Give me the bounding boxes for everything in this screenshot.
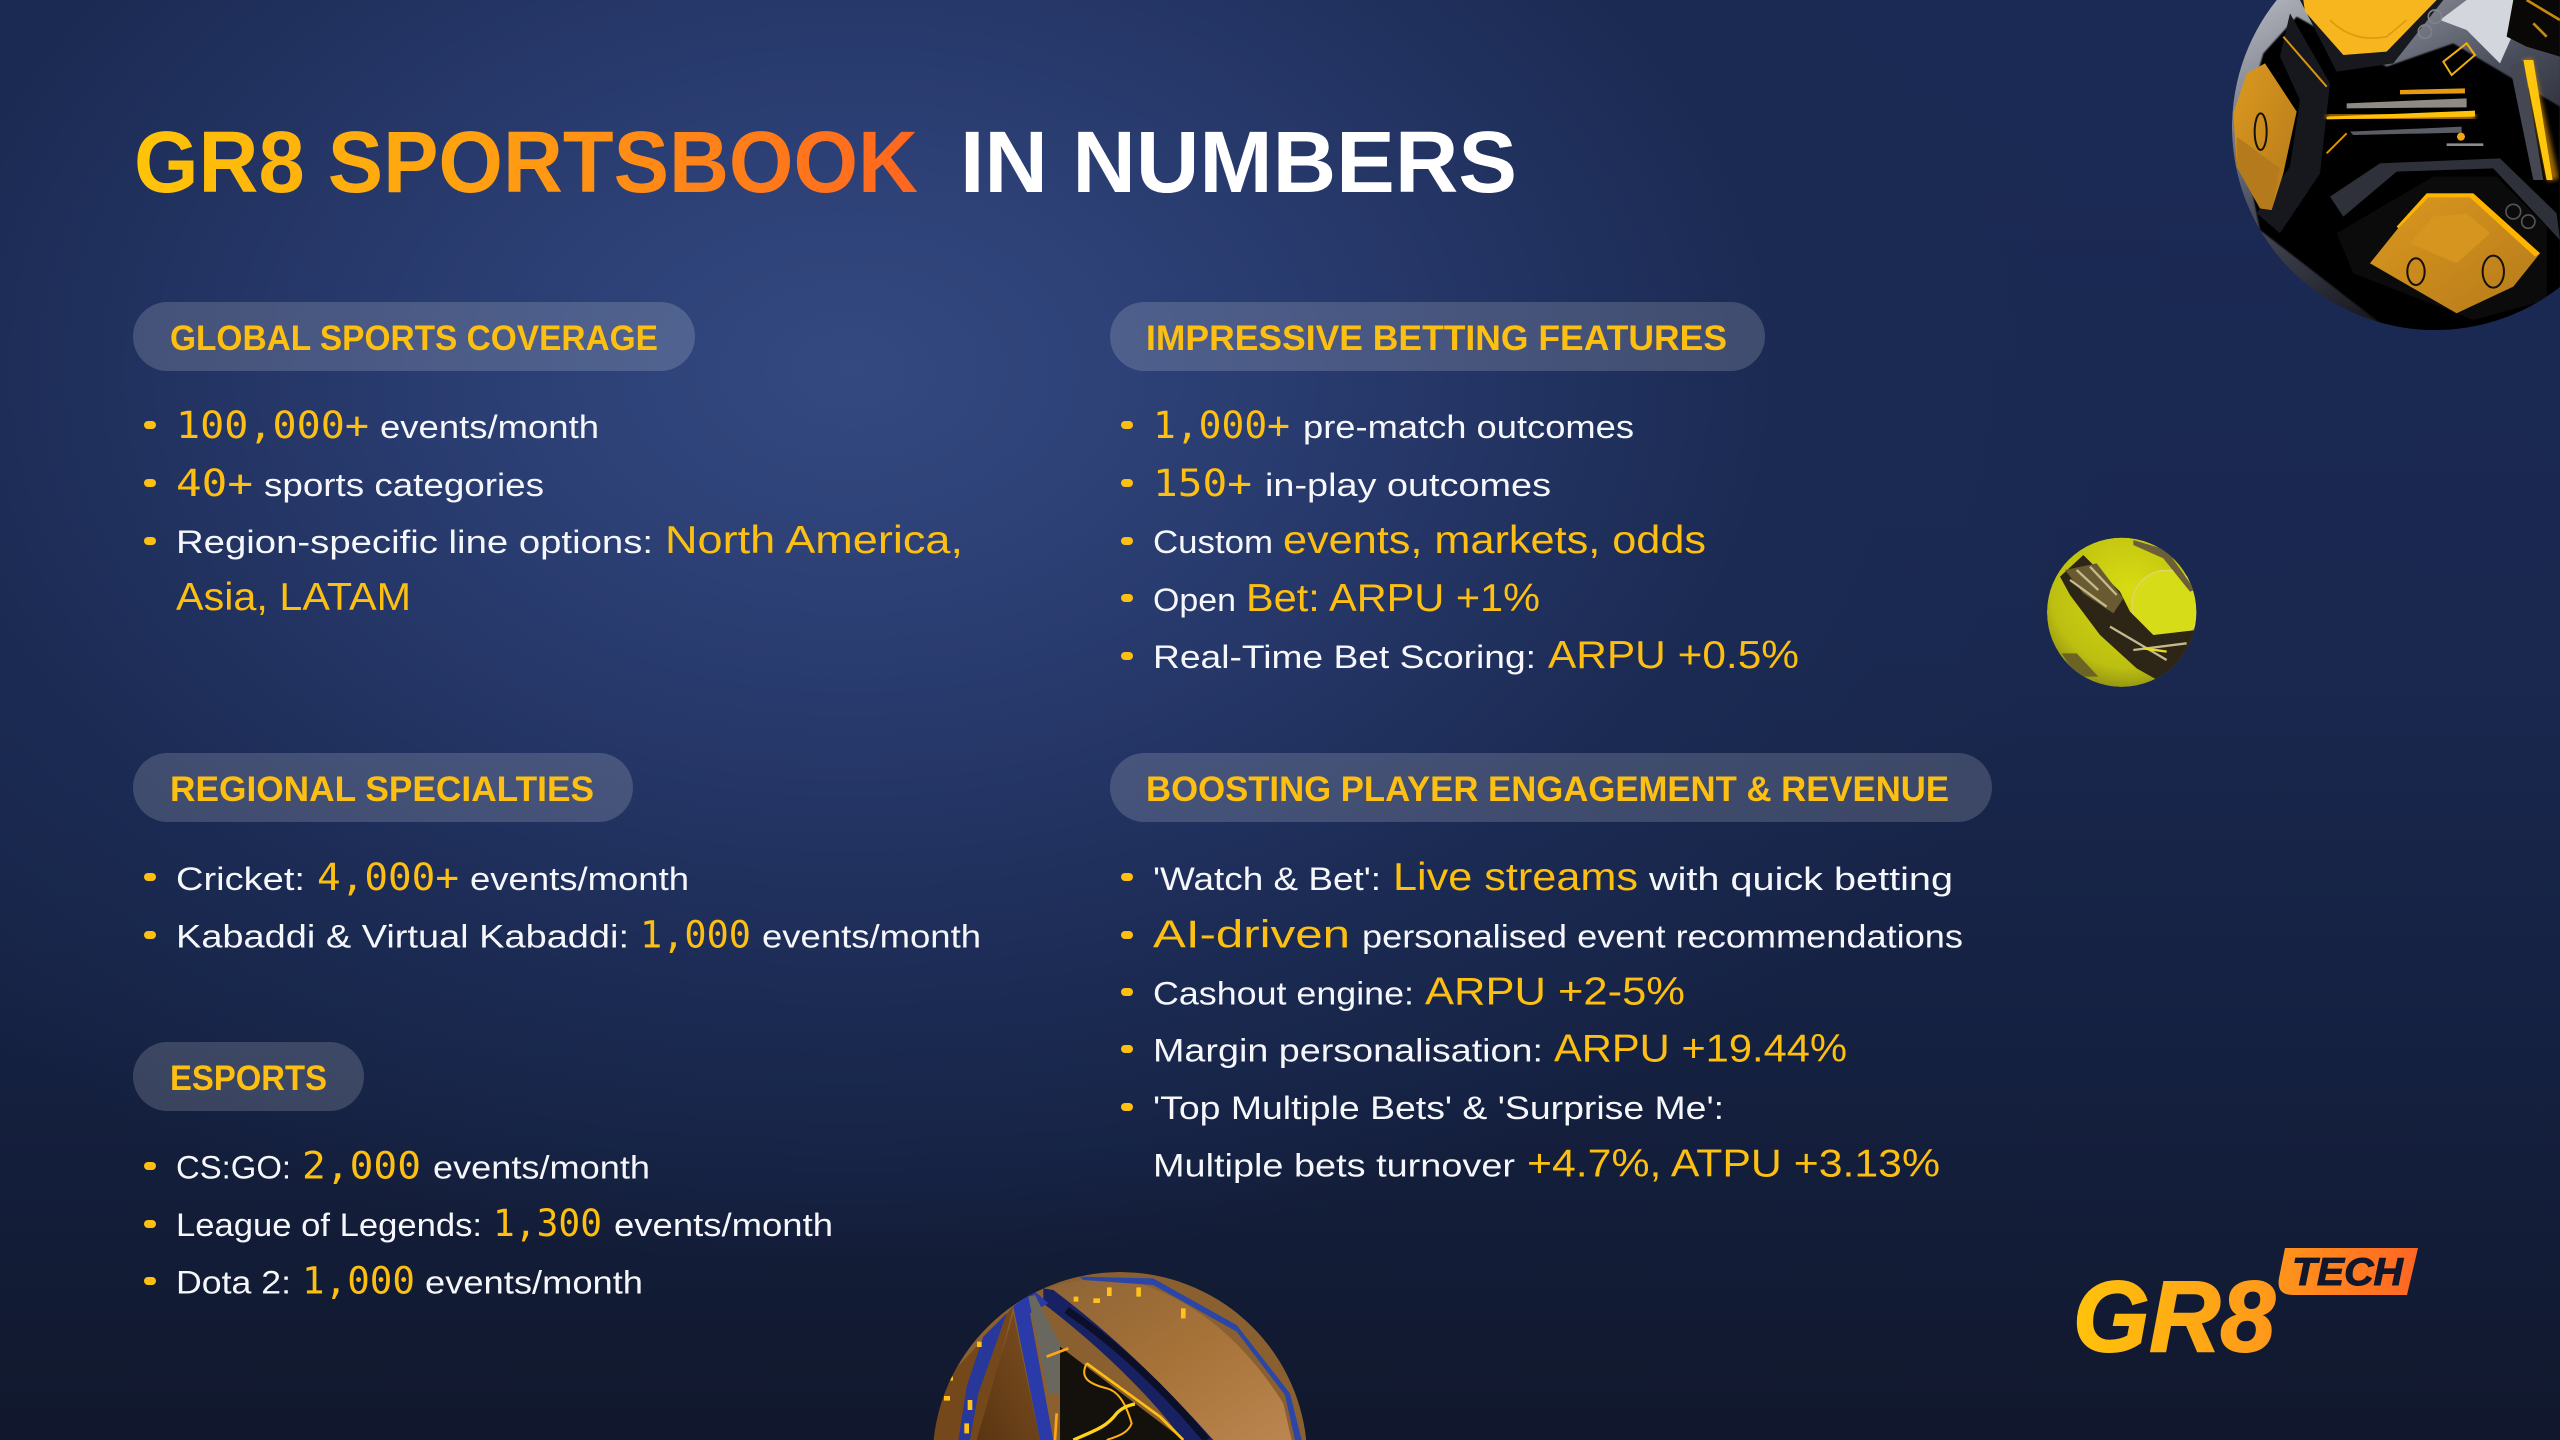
heading: impressive betting features [1110, 302, 1765, 371]
list item: in-play outcomes: in-play outcomes [1265, 467, 1551, 503]
list item: dota 2: events/month [425, 1264, 643, 1300]
list item: kabaddi: Kabaddi & Virtual Kabaddi: [176, 918, 629, 954]
list item: pre-match outcomes [1121, 404, 1634, 447]
list item: cricket [144, 856, 689, 899]
list item: region-specific line options [144, 519, 963, 619]
list item: real-time bet scoring [1121, 634, 1799, 677]
panel: regional specialties [133, 753, 981, 956]
list item: sports categories [144, 462, 544, 505]
list item: ai-driven recommendations: AI-driven [1153, 914, 1350, 956]
list item: dota 2 [144, 1260, 643, 1302]
list item: top multiple bets: Multiple bets turnover [1153, 1148, 1515, 1184]
list item: kabaddi [144, 914, 981, 956]
list item: watch and bet: Live streams [1393, 856, 1638, 899]
list item: margin personalisation: Margin personalisation: [1153, 1032, 1543, 1068]
heading: boosting player engagement and revenue: BOOSTING PLAYER ENGAGEMENT & REVENUE [1146, 770, 1949, 809]
list item: custom events [1121, 519, 1706, 562]
list item: margin personalisation: ARPU +19.44% [1554, 1028, 1847, 1070]
heading: regional specialties: REGIONAL SPECIALTIES [170, 770, 594, 809]
list item: margin personalisation [1121, 1028, 1847, 1070]
list item: region-specific line options: Asia, LATAM [176, 576, 411, 619]
list item: open bet: Bet: ARPU +1% [1246, 577, 1540, 620]
list item: pre-match outcomes: 1,000+ [1153, 404, 1290, 447]
heading: esports [133, 1042, 364, 1111]
list item: open bet: Open [1153, 582, 1236, 618]
title [134, 114, 1517, 211]
heading: global sports coverage [133, 302, 695, 371]
list item: league of legends [144, 1202, 833, 1245]
list item: cashout engine: Cashout engine: [1153, 976, 1414, 1012]
list item: sports categories: sports categories [264, 467, 544, 503]
list item: custom events: events, markets, odds [1283, 519, 1706, 562]
heading: boosting player engagement and revenue [1110, 753, 1992, 822]
list item: pre-match outcomes: pre-match outcomes [1303, 409, 1634, 445]
list item: real-time bet scoring: Real-Time Bet Scoring: [1153, 639, 1536, 675]
list item: region-specific line options: Region-specific line options: [176, 524, 653, 560]
panel: impressive betting features [1110, 302, 1799, 677]
list item: in-play outcomes: 150+ [1153, 462, 1252, 505]
list item: watch and bet: 'Watch & Bet': [1153, 861, 1381, 897]
list item: cs:go: events/month [433, 1150, 650, 1186]
panel: esports [133, 1042, 833, 1302]
list item: top multiple bets [1121, 1090, 1940, 1186]
list item: events per month: events/month [380, 409, 599, 445]
icon: futuristic tennis ball [2047, 538, 2201, 687]
logo: GR8 TECH: TECH [2292, 1251, 2404, 1294]
list item: in-play outcomes [1121, 462, 1551, 505]
list item: cricket: events/month [470, 861, 689, 897]
heading: regional specialties [133, 753, 633, 822]
panel: boosting player engagement and revenue [1110, 753, 1992, 1186]
title: IN NUMBERS [960, 114, 1517, 211]
list item: custom events: Custom [1153, 524, 1273, 560]
list item: watch and bet: with quick betting [1648, 861, 1953, 897]
icon: futuristic football [2232, 0, 2560, 333]
list item: region-specific line options: North America, [665, 519, 963, 562]
list item: cashout engine: ARPU +2-5% [1425, 970, 1685, 1014]
list item: kabaddi: events/month [762, 918, 981, 954]
list item: ai-driven recommendations: personalised event recommendations [1362, 918, 1963, 954]
heading: global sports coverage: GLOBAL SPORTS COVERAGE [170, 319, 658, 358]
icon: futuristic basketball [933, 1272, 1306, 1440]
list item: league of legends: events/month [614, 1207, 833, 1243]
list item: top multiple bets: 'Top Multiple Bets' & 'Surprise Me': [1153, 1090, 1724, 1126]
list item: top multiple bets: +4.7%, ATPU +3.13% [1527, 1142, 1940, 1186]
list item: cs:go [144, 1144, 650, 1188]
list item: cs:go: CS:GO: [176, 1150, 291, 1186]
list item: ai-driven recommendations [1121, 914, 1963, 956]
list item: kabaddi: 1,000 [640, 914, 751, 956]
list item: cs:go: 2,000 [302, 1144, 421, 1188]
list item: cricket: 4,000+ [317, 856, 459, 899]
list item: open bet [1121, 577, 1540, 620]
list item: cashout engine [1121, 970, 1685, 1014]
list item: dota 2: Dota 2: [176, 1264, 291, 1300]
list item: watch and bet [1121, 856, 1953, 899]
list item: league of legends: League of Legends: [176, 1207, 482, 1243]
heading: impressive betting features: IMPRESSIVE BETTING FEATURES [1146, 319, 1727, 358]
logo: GR8 TECH: GR8 [2073, 1261, 2275, 1373]
list item: real-time bet scoring: ARPU +0.5% [1548, 634, 1799, 677]
list item: dota 2: 1,000 [302, 1260, 415, 1302]
list item: events per month: 100,000+ [176, 404, 369, 447]
heading: esports: ESPORTS [170, 1059, 327, 1098]
list item: cricket: Cricket: [176, 861, 305, 897]
logo: GR8 TECH [2073, 1248, 2418, 1373]
list item: sports categories: 40+ [176, 462, 253, 505]
panel: global sports coverage [133, 302, 963, 619]
list item: events per month [144, 404, 599, 447]
title: GR8 SPORTSBOOK [134, 114, 918, 211]
list item: league of legends: 1,300 [493, 1202, 602, 1245]
